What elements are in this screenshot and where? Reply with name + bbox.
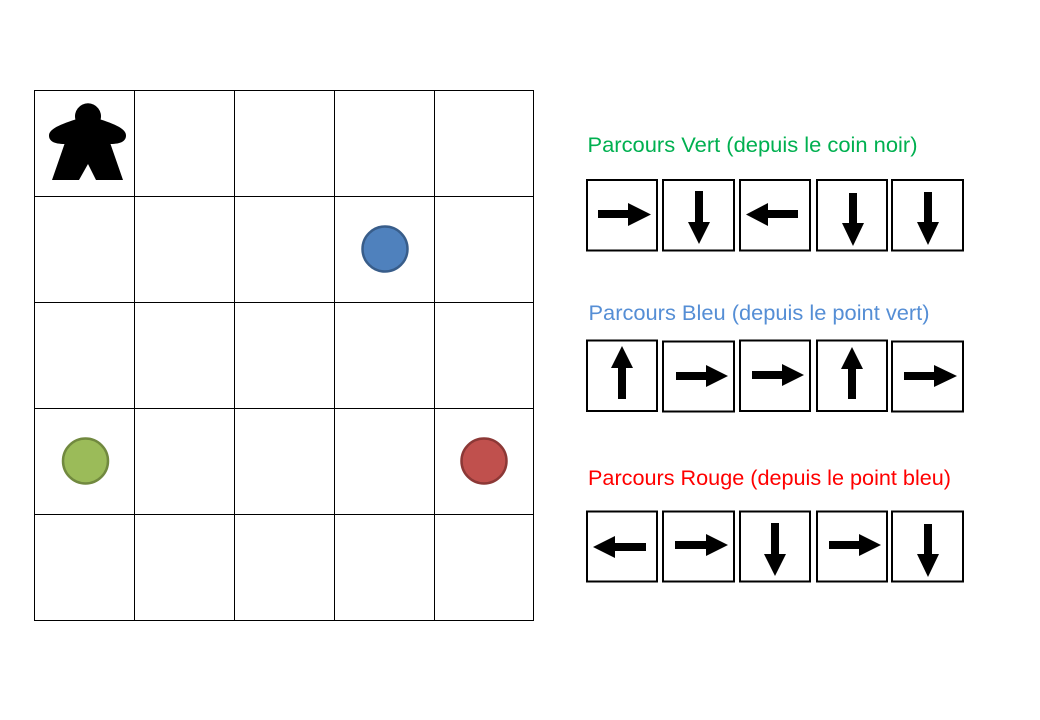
green point bbox=[63, 438, 108, 484]
arrow: down bbox=[688, 191, 710, 244]
arrow: left bbox=[593, 536, 646, 558]
arrow: down bbox=[917, 192, 939, 245]
game board grid bbox=[34, 90, 534, 620]
panel: blue route arrows bbox=[587, 340, 963, 412]
heading: blue route: Parcours Bleu (depuis le point vert) bbox=[588, 301, 930, 325]
arrow: right bbox=[675, 534, 728, 556]
arrow: right bbox=[829, 534, 881, 556]
panel: red route arrows bbox=[587, 512, 963, 582]
heading: green route: Parcours Vert (depuis le coin noir) bbox=[588, 133, 918, 157]
red point bbox=[462, 438, 506, 484]
arrow: left bbox=[746, 203, 798, 226]
arrow: down bbox=[917, 524, 939, 577]
arrow: right bbox=[904, 365, 957, 387]
panel: green route arrows bbox=[587, 180, 963, 250]
arrow: right bbox=[752, 364, 804, 386]
arrow: down bbox=[764, 523, 786, 576]
arrow: up bbox=[841, 347, 863, 399]
arrow: right bbox=[598, 203, 651, 226]
arrow: up bbox=[611, 346, 633, 399]
blue point bbox=[362, 226, 408, 272]
arrow: right bbox=[676, 365, 728, 387]
icon: black meeple bbox=[49, 103, 126, 180]
heading: red route: Parcours Rouge (depuis le point bleu) bbox=[588, 466, 951, 490]
arrow: down bbox=[842, 193, 864, 246]
